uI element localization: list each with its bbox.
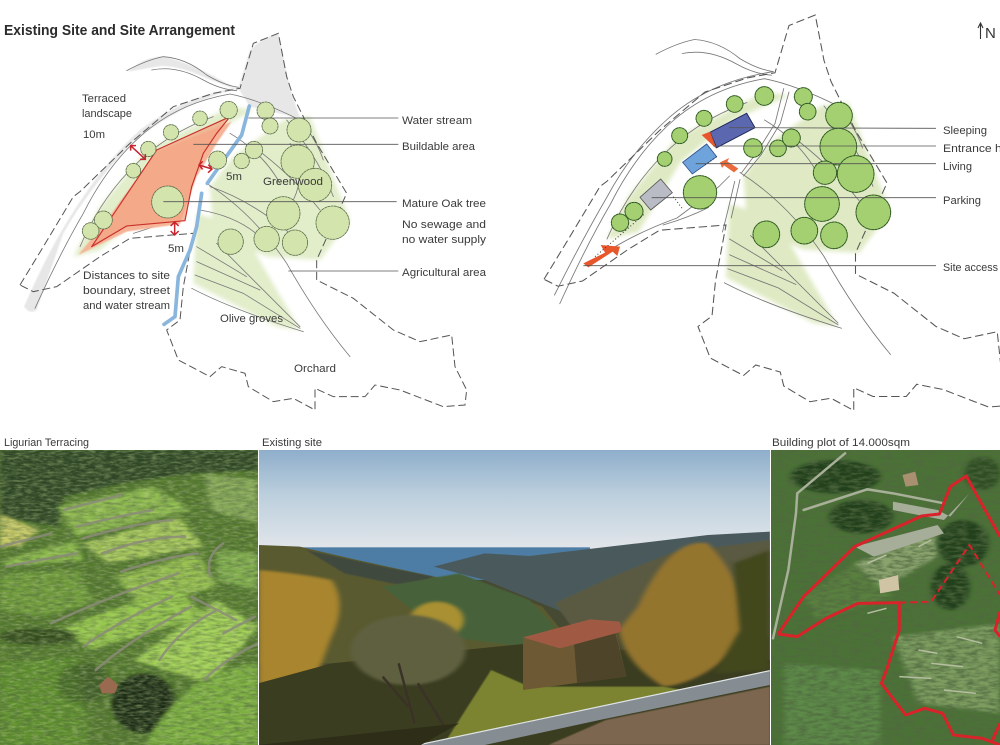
- site plan labels: and water stream: [83, 300, 170, 312]
- dry brush foreground: [549, 687, 770, 745]
- sky: [259, 450, 770, 550]
- site plan labels: 10m: [83, 129, 105, 141]
- site plan labels: Orchard: [294, 363, 336, 375]
- photo captions: Building plot of 14.000sqm: [772, 437, 910, 449]
- arrangement labels: [943, 125, 1000, 274]
- site plan labels: Olive groves: [220, 313, 284, 325]
- dashed plot boundary: [899, 545, 1000, 603]
- leader lines: [163, 118, 398, 271]
- site plan labels: 5m: [168, 243, 184, 255]
- green hill centre: [383, 573, 555, 647]
- photo: existing site: [258, 450, 770, 745]
- left hill shadow: [306, 550, 434, 587]
- entrance arrow: [720, 158, 738, 172]
- terrace marks: [867, 540, 982, 693]
- grey road and peak: [24, 33, 300, 312]
- arrangement labels: Parking: [943, 195, 981, 207]
- distance arrows: [131, 146, 212, 235]
- stone house walls: [523, 630, 626, 690]
- site plan labels: Terraced: [82, 93, 126, 105]
- north arrow: N: [985, 25, 996, 42]
- dark trees right edge: [714, 550, 770, 673]
- site plan labels: Agricultural area: [402, 267, 487, 279]
- site plan labels: boundary, street: [83, 285, 170, 297]
- house shadow side: [574, 633, 626, 683]
- autumn trees left: [259, 569, 343, 683]
- site plan labels: 5m: [226, 171, 242, 183]
- grass slope: [447, 670, 679, 738]
- building: sleeping: [710, 113, 755, 148]
- sunlit terrace fields: [0, 473, 258, 745]
- foliage texture: [770, 450, 1000, 745]
- arrangement labels: Living: [943, 161, 972, 173]
- olive tree trunk: [383, 663, 446, 730]
- photo contents: [258, 532, 770, 745]
- photo: Ligurian terracing: [0, 450, 258, 745]
- road and terrace lines: [554, 40, 890, 355]
- dashed site boundary: [544, 15, 1000, 411]
- distant ridge: [434, 532, 770, 617]
- site plan labels: Mature Oak tree: [402, 198, 486, 210]
- yellow tree: [410, 602, 464, 638]
- red roof: [523, 619, 622, 648]
- lighter clearings: [784, 530, 1000, 745]
- photo captions: Existing site: [262, 437, 322, 449]
- arrangement labels: Site access: [943, 262, 998, 274]
- bright foreground foliage: [147, 663, 258, 745]
- red outline: [92, 117, 230, 247]
- dark forest top: [0, 450, 258, 527]
- green wash: vegetation: [73, 107, 350, 330]
- terrace and road lines: [35, 57, 350, 357]
- middle ridge right: [555, 540, 770, 637]
- orange wash: [78, 122, 232, 255]
- photo: aerial building plot: [770, 450, 1000, 745]
- dark grass bottom: [258, 723, 459, 745]
- olive tree: [351, 615, 466, 685]
- site plan labels: [82, 93, 487, 375]
- plot boundary: [778, 476, 1000, 745]
- roads: [773, 453, 944, 638]
- valley ground and foreground dark: [258, 643, 770, 745]
- aerial base: [771, 450, 1000, 745]
- road edge: [418, 671, 770, 745]
- dotted access path: [595, 157, 717, 257]
- leader lines: [583, 128, 936, 266]
- trees: [611, 87, 891, 249]
- paved turn: [855, 493, 969, 557]
- dashed site boundary: [20, 33, 467, 410]
- building: living: [683, 144, 717, 174]
- arrangement labels: Sleeping: [943, 125, 987, 137]
- parking: [640, 179, 672, 210]
- buildable area: [78, 117, 232, 255]
- aerial contents: [770, 450, 1000, 745]
- left hill: [258, 545, 561, 663]
- site plan labels: Distances to site: [83, 270, 170, 282]
- site plan labels: Buildable area: [402, 141, 476, 153]
- site plan labels: no water supply: [402, 234, 487, 246]
- foliage texture light: [0, 450, 258, 745]
- building: entrance hall: [702, 132, 717, 149]
- site sketch: existing conditions: [20, 33, 467, 410]
- arrangement: trees and buildings: [583, 87, 936, 267]
- landscape base: [258, 580, 770, 745]
- small stone hut: [99, 677, 118, 693]
- houses: [879, 472, 918, 593]
- sea: [302, 547, 590, 580]
- large autumn tree right: [619, 543, 745, 687]
- photo captions: [4, 437, 910, 449]
- stone terrace walls: [0, 495, 258, 680]
- water stream: [164, 106, 249, 324]
- photo contents: [0, 450, 258, 745]
- site plan labels: Greenwood: [263, 176, 323, 188]
- photo captions: Ligurian Terracing: [4, 437, 89, 449]
- foliage texture dark: [0, 450, 258, 745]
- photo base: [0, 450, 258, 745]
- site plan labels: Water stream: [402, 115, 472, 127]
- north arrow: [978, 23, 996, 42]
- title: Existing Site and Site Arrangement: [4, 23, 235, 39]
- road: [418, 670, 770, 745]
- panel: existing site plan: [20, 33, 487, 410]
- site access arrow: [583, 245, 620, 267]
- dark forest patches: [791, 457, 1000, 610]
- site sketch linework: [544, 15, 1000, 411]
- site plan labels: No sewage and: [402, 219, 486, 231]
- dark shadow patches: [0, 628, 175, 733]
- site plan labels: landscape: [82, 108, 132, 120]
- panel: site arrangement plan: [544, 15, 1000, 411]
- green wash: vegetation: [607, 92, 890, 327]
- trees: [82, 101, 349, 255]
